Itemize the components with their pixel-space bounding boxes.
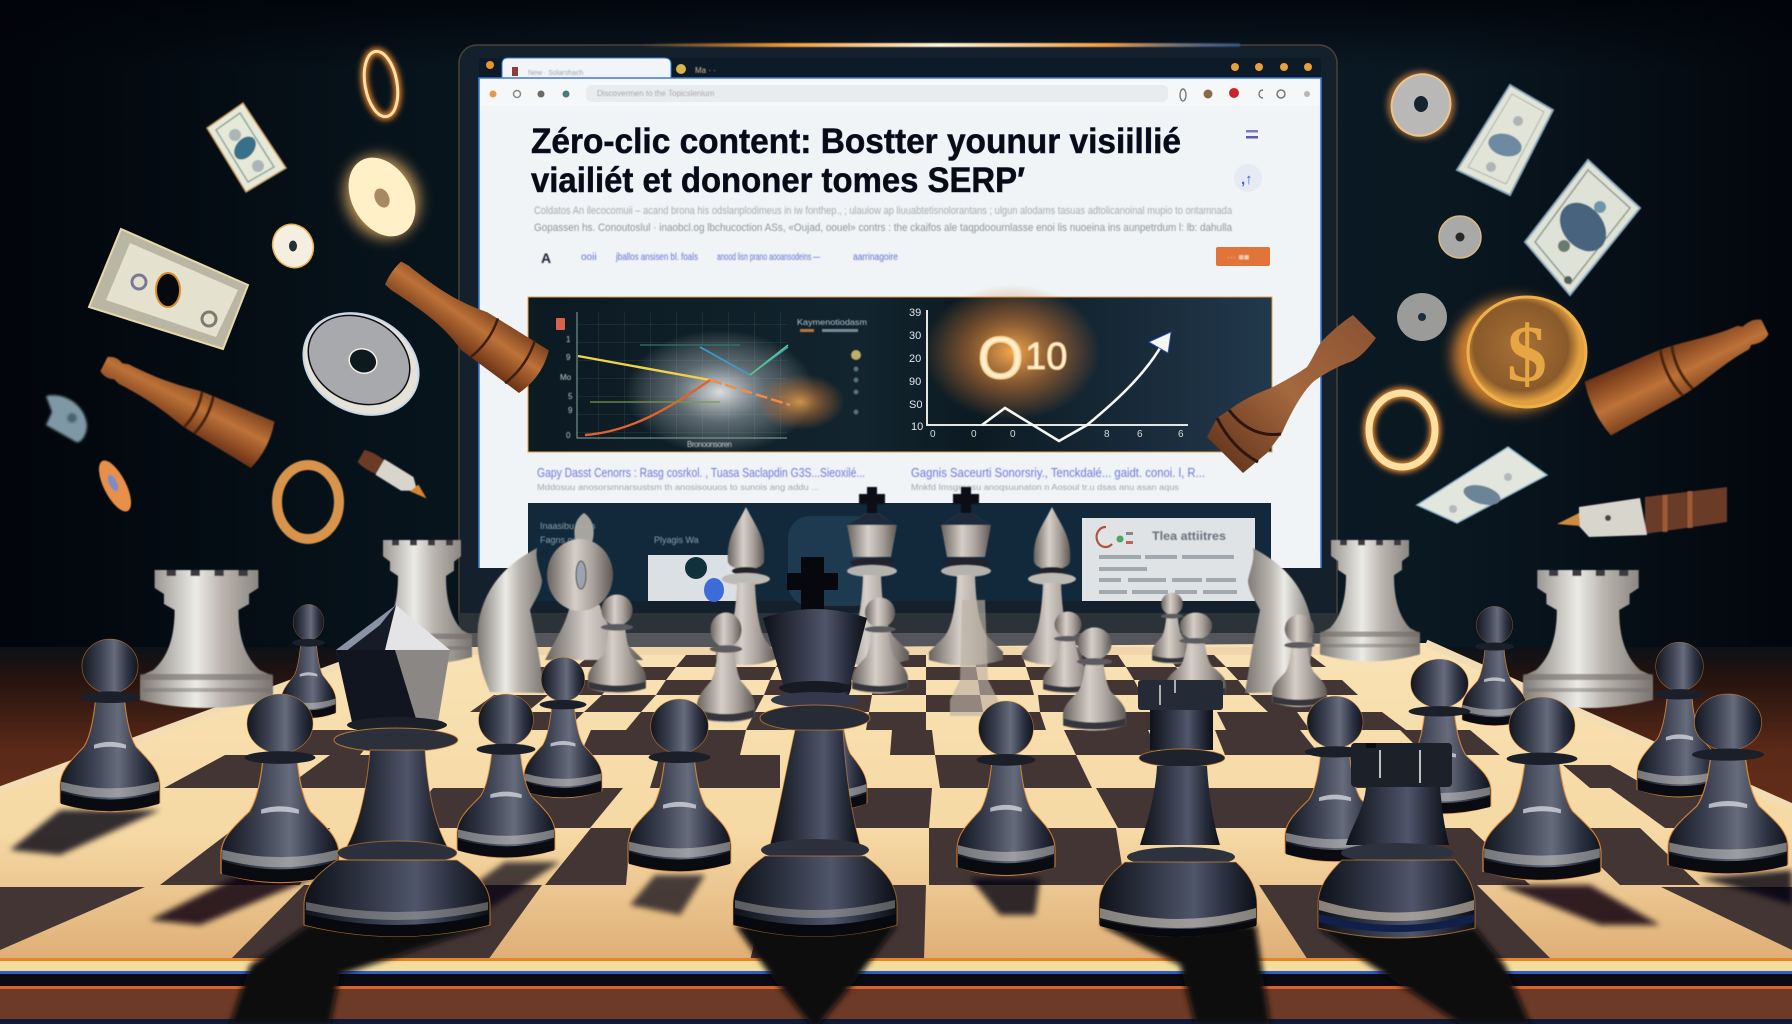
gold dollar coin: $ (1507, 311, 1547, 399)
small orange disc (92, 456, 138, 516)
x labels: 0 (1010, 429, 1016, 440)
glowing ring (1369, 393, 1435, 467)
bill large (89, 229, 248, 349)
gold dollar coin (1453, 297, 1586, 411)
lower dark panel (528, 503, 1271, 601)
growth arrow head (1149, 332, 1171, 353)
white knight right (1245, 548, 1312, 693)
chart axis labels: 0 (566, 431, 571, 440)
panel text: Plyagis Wa (654, 535, 699, 545)
monitor top light (640, 43, 1240, 47)
bill right (1525, 160, 1640, 295)
white disc bishop (545, 513, 643, 660)
black queen (304, 605, 490, 936)
chart series lines (578, 345, 790, 435)
orange ring (277, 465, 339, 539)
google card: Tlea attiitres (1152, 529, 1226, 543)
x labels: 0 (971, 429, 977, 440)
blurry disc (46, 395, 87, 442)
screen blue edge (479, 78, 1321, 568)
white rook right (1320, 540, 1420, 661)
summary text (534, 205, 1233, 234)
disc grey (1397, 293, 1447, 341)
laptop monitor (459, 43, 1337, 647)
chart glow (625, 330, 815, 454)
x labels: 6 (1178, 429, 1184, 440)
side icons: ,↑ (1241, 171, 1253, 188)
y labels: 90 (909, 376, 921, 388)
y labels: S0 (909, 399, 922, 411)
right growth chart (909, 284, 1188, 441)
chart red icon (556, 318, 565, 330)
chart axis labels: 9 (568, 406, 573, 415)
small disc (266, 218, 320, 274)
chart legend: Kaymenotiodasm (797, 318, 867, 327)
monitor frame (459, 45, 1337, 635)
chart axis labels: Mo (560, 373, 572, 382)
panel soft highlight (788, 516, 878, 606)
bill small (207, 103, 286, 192)
stub right (1557, 487, 1727, 537)
white rook far right (1523, 570, 1653, 708)
silver pawns (588, 593, 1327, 731)
chart axis (577, 312, 787, 438)
wood piece over screen left (377, 251, 553, 396)
white back pieces (140, 487, 1653, 731)
orange button: ··· ■■ (1227, 252, 1249, 262)
chart axis labels: 5 (568, 392, 573, 401)
browser screen (479, 78, 1321, 568)
chart orange glow (755, 374, 845, 430)
glowing ring top (360, 49, 402, 119)
floating items right (1207, 65, 1778, 537)
wood piece lower (92, 341, 278, 470)
glowing number: 10 (1025, 336, 1067, 378)
y labels: 39 (909, 307, 921, 319)
dark squares (0, 655, 1792, 960)
result links (537, 465, 1205, 492)
panel text: Inaasibu · Brs (540, 521, 596, 531)
browser toolbar (480, 79, 1320, 106)
chart axis labels: 9 (566, 353, 571, 362)
side icons (1234, 130, 1262, 192)
x labels: 8 (1104, 429, 1110, 440)
growth line (982, 343, 1163, 441)
x labels: 0 (930, 429, 936, 440)
small stub (356, 448, 433, 504)
chart axis labels: 1 (566, 335, 571, 344)
link row (541, 250, 898, 266)
wood piece over screen right (1207, 315, 1376, 473)
link row: jballos ansisen bl. foals (615, 252, 698, 263)
white rook far left (140, 570, 273, 708)
left line chart (556, 312, 867, 454)
title: viailiét et dononer tomes SERP′ (531, 161, 1025, 200)
white rook left (372, 540, 472, 664)
reflected ghost column (950, 600, 998, 716)
chart legend (797, 318, 867, 414)
monitor bottom bands (459, 613, 1337, 647)
white bishop left (716, 507, 776, 665)
white knight left (478, 548, 545, 693)
browser tab bar (479, 58, 1321, 80)
y axis and x axis (927, 310, 1188, 425)
chart panel (528, 297, 1272, 452)
link row: aarrinagoire (853, 252, 898, 263)
y labels: 20 (909, 353, 921, 365)
x labels: 6 (1137, 429, 1143, 440)
piece shadows (10, 810, 1792, 1024)
title: Zéro-clic content: Bostter younur visiillié (531, 122, 1181, 161)
y labels: 30 (909, 330, 921, 342)
front strip (0, 958, 1792, 1024)
chart grid (577, 312, 787, 440)
black rook tall (1099, 680, 1257, 937)
black king (733, 557, 897, 936)
panel image card (648, 555, 740, 602)
summary text: Coldatos An ilecocomuii – acand brona his odslanplodimeus in iw fonthep., ; ulauiow ap liuuabtetisnolorantans ; ulgun alodams tasuas adtolicanoinal mupio to ontamnada (534, 205, 1233, 217)
king left (835, 487, 909, 666)
link row: A (541, 250, 551, 266)
glowing number: O (978, 326, 1023, 391)
big silver disc (285, 293, 437, 435)
bill top (1457, 85, 1553, 195)
browser tab bar: New · Solarshach (528, 70, 583, 77)
summary text: Gopassen hs. Conoutoslul · inaobcl.og lbchucoction ASs, «Oujad, oouel» contrs : the ckaifos ale taqpdoournlasse enoi lis nuoeina ins aunpetrdum l: lb: dahulla (534, 222, 1233, 234)
link row: anood lisn prano aooansodeins — (717, 252, 820, 263)
browser tab bar: Ma · · (695, 66, 716, 75)
board surface (0, 643, 1792, 960)
result links: Gapy Dasst Cenorrs : Rasg cosrkol. , Tuasa Saclapdin G3S...Sieoxilé... (537, 465, 865, 480)
board edge right (1426, 643, 1792, 807)
chess board (0, 643, 1792, 960)
browser toolbar: Discovermen to the Topicslenium (597, 89, 715, 98)
wood piece right (1581, 300, 1778, 437)
panel text (540, 521, 699, 545)
black rook front (1318, 743, 1475, 938)
board edge left (0, 650, 381, 790)
chart axis labels: Bronoonsoren (687, 440, 732, 449)
glow behind number (924, 284, 1100, 420)
disc top (1382, 65, 1460, 145)
table (0, 647, 1792, 1024)
x labels (930, 429, 1184, 440)
dark pawns back row (60, 604, 1788, 883)
google card (1082, 518, 1255, 601)
result links: Gagnis Saceurti Sonorsriy., Tenckdalé... gaidt. conoi. l, R... (911, 465, 1205, 480)
king right (929, 487, 1003, 666)
result links: Mnkfd Imsgrnasu anoqsuunaton n Aosoul tr.u dsas anu asan aqus (911, 483, 1179, 492)
result links: Mddosuu anosorsmnarsustsm th anosisouuos to sunois ang addu ... (537, 483, 819, 492)
floating items left (46, 49, 437, 539)
chart axis labels (560, 335, 732, 449)
bill lower (1417, 447, 1547, 523)
title (531, 122, 1181, 200)
panel text: Fagns os ... (540, 535, 587, 545)
y labels: 10 (911, 421, 923, 433)
back band (420, 647, 1380, 655)
orange button (1216, 247, 1270, 266)
white bishop right (1022, 507, 1082, 665)
link row: ooii (581, 252, 597, 263)
disc small (1439, 216, 1481, 258)
glowing disc (332, 144, 432, 250)
y labels (909, 307, 923, 433)
